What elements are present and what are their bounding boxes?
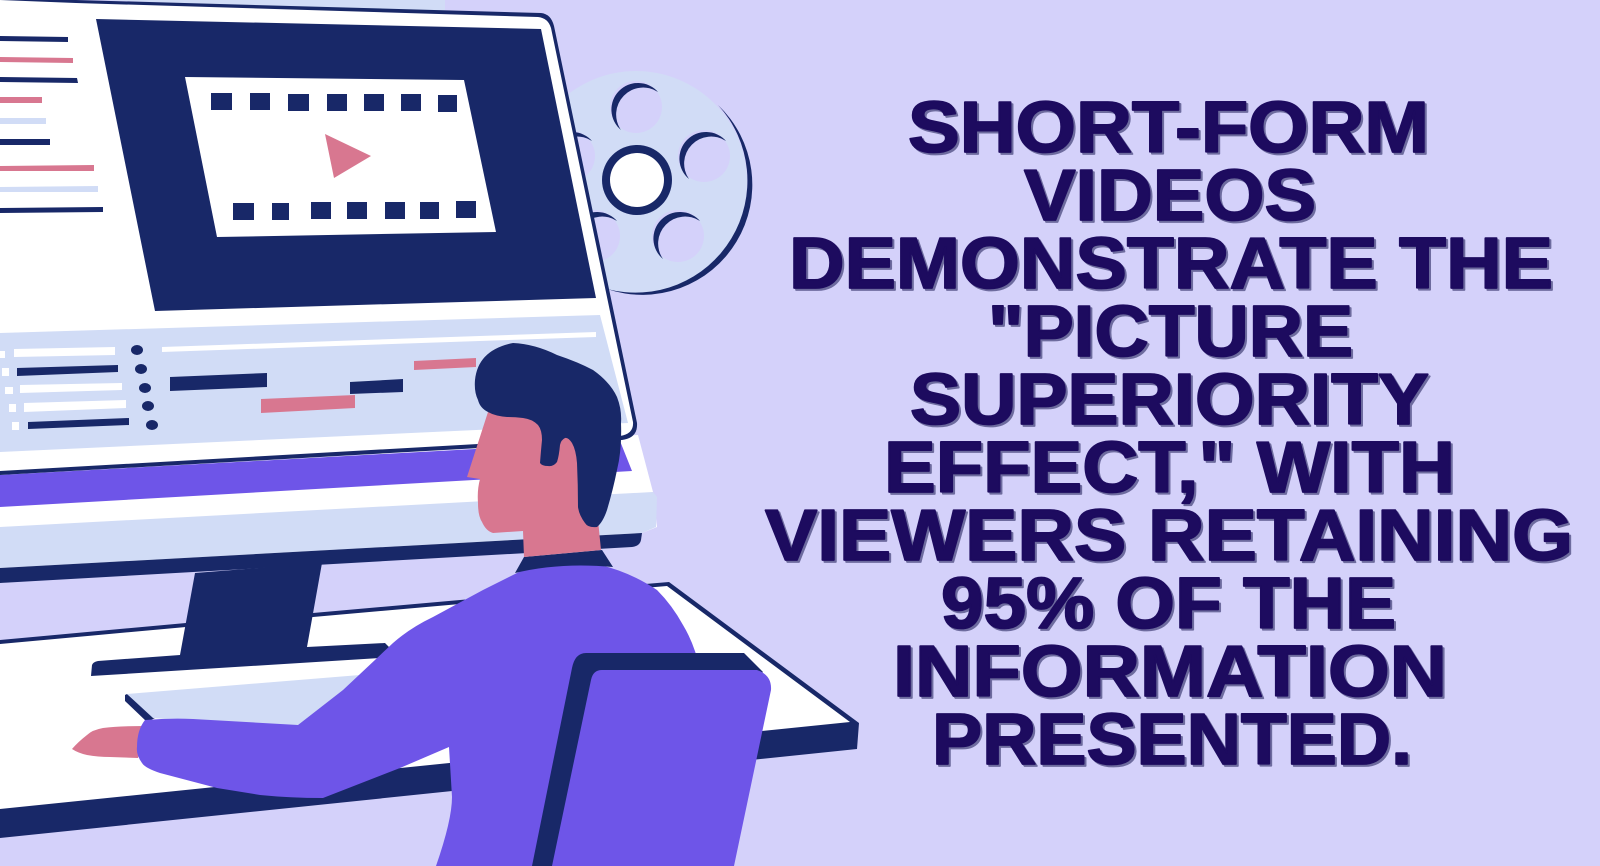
title text: INFORMATION [893, 632, 1447, 712]
title text: EFFECT," WITH [884, 428, 1455, 508]
hair [475, 343, 621, 527]
monitor stand [91, 563, 390, 676]
title text: SUPERIORITY [910, 360, 1429, 440]
title text: DEMONSTRATE THE [789, 224, 1553, 304]
icon: film reel [525, 71, 752, 295]
title text: PRESENTED. [932, 700, 1412, 780]
icon: play triangle [325, 134, 371, 178]
person [72, 343, 710, 866]
title text [765, 88, 1573, 780]
monitor frame [0, 0, 637, 475]
sidebar lines [0, 36, 103, 213]
face and neck [467, 412, 601, 557]
desk [0, 582, 859, 838]
title text: VIEWERS RETAINING [765, 496, 1573, 576]
title text: VIDEOS [1024, 156, 1316, 236]
title text: "PICTURE [988, 292, 1353, 372]
torso and arm [137, 564, 710, 866]
collar [515, 550, 613, 573]
monitor chin [0, 435, 657, 583]
keyboard [125, 675, 383, 730]
film frame [185, 77, 496, 237]
title text: SHORT-FORM [908, 88, 1429, 168]
film sprockets [211, 93, 476, 220]
monitor [0, 0, 657, 583]
title text: 95% OF THE [941, 564, 1396, 644]
light wedge above monitor [100, 0, 445, 13]
chair [532, 653, 771, 866]
timeline contents [0, 332, 596, 430]
timeline panel [0, 315, 628, 452]
hand [72, 726, 145, 758]
preview screen [96, 19, 596, 311]
purple band [0, 441, 632, 507]
